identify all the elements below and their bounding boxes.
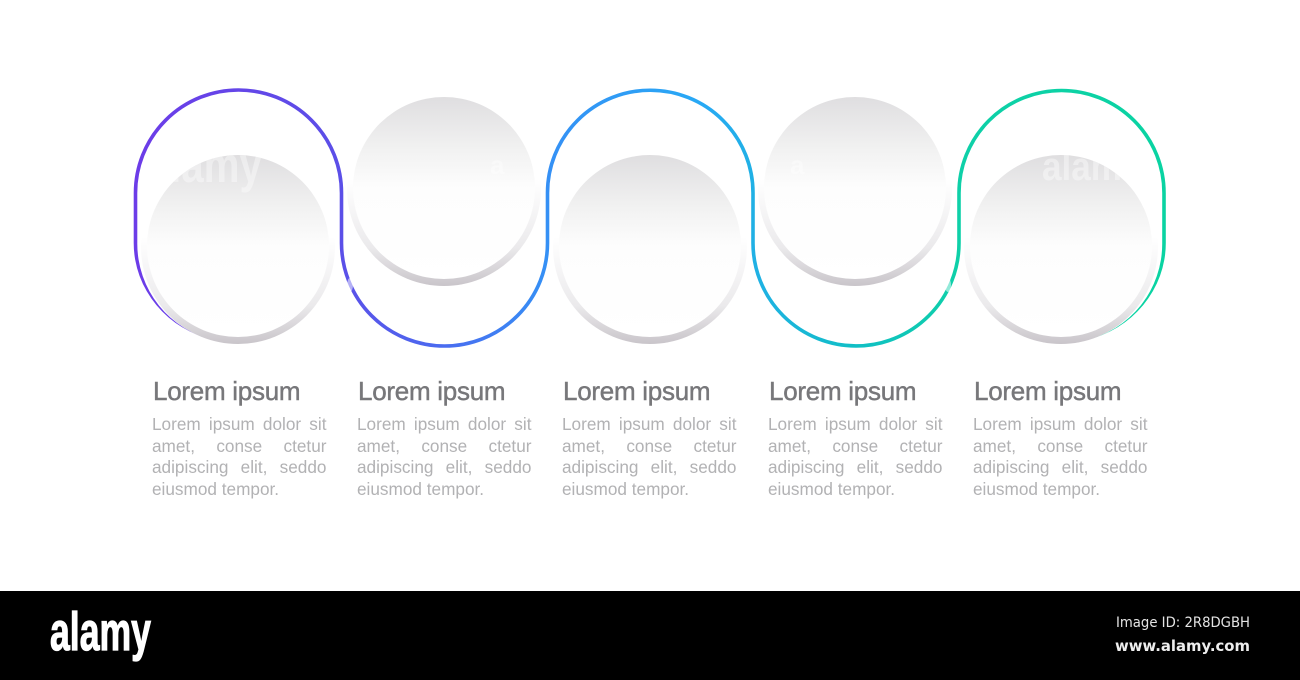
text block 5: adipiscing elit, seddo [973, 457, 1148, 477]
footer bar [0, 591, 1300, 680]
text block 4: eiusmod tempor. [768, 479, 895, 499]
text block 2: eiusmod tempor. [357, 479, 484, 499]
text block 1 [152, 376, 326, 499]
text block 2: Lorem ipsum dolor sit [357, 414, 532, 434]
text block 1: adipiscing elit, seddo [152, 457, 326, 477]
text block 1: Lorem ipsum [153, 376, 300, 406]
circle 5: alam [1042, 145, 1122, 189]
text block 5 [973, 376, 1148, 499]
circle 1 [143, 155, 333, 344]
text block 3: Lorem ipsum [563, 376, 710, 406]
text block 5: amet, conse ctetur [973, 436, 1148, 456]
text block 5: Lorem ipsum dolor sit [973, 414, 1148, 434]
text block 1: amet, conse ctetur [152, 436, 326, 456]
circle 2: a [490, 150, 505, 180]
website: www.alamy.com [1115, 637, 1250, 655]
text block 5: eiusmod tempor. [973, 479, 1100, 499]
text block 5: Lorem ipsum [974, 376, 1121, 406]
text block 1: eiusmod tempor. [152, 479, 279, 499]
circle 4 [758, 92, 952, 286]
text block 2: Lorem ipsum [358, 376, 505, 406]
text block 3: amet, conse ctetur [562, 436, 736, 456]
text block 3 [562, 376, 736, 499]
text block 4 [768, 376, 942, 499]
text block 4: amet, conse ctetur [768, 436, 942, 456]
footer logo: alamy [50, 602, 151, 662]
text block 4: Lorem ipsum dolor sit [768, 414, 942, 434]
text block 3: eiusmod tempor. [562, 479, 689, 499]
winding gradient line [134, 90, 1166, 346]
text block 4: adipiscing elit, seddo [768, 457, 942, 477]
text block 3: Lorem ipsum dolor sit [562, 414, 736, 434]
text block 1: Lorem ipsum dolor sit [152, 414, 326, 434]
circle 4: a [790, 150, 805, 180]
text block 2: amet, conse ctetur [357, 436, 532, 456]
text block 2: adipiscing elit, seddo [357, 457, 532, 477]
circle 5 [964, 145, 1158, 344]
text block 2 [357, 376, 532, 499]
image id: Image ID: 2R8DGBH [1116, 615, 1250, 631]
circle 1: lamy [170, 137, 262, 193]
text block 4: Lorem ipsum [769, 376, 916, 406]
text block 3: adipiscing elit, seddo [562, 457, 736, 477]
circle 2 [347, 92, 541, 286]
circle 3 [553, 150, 747, 344]
